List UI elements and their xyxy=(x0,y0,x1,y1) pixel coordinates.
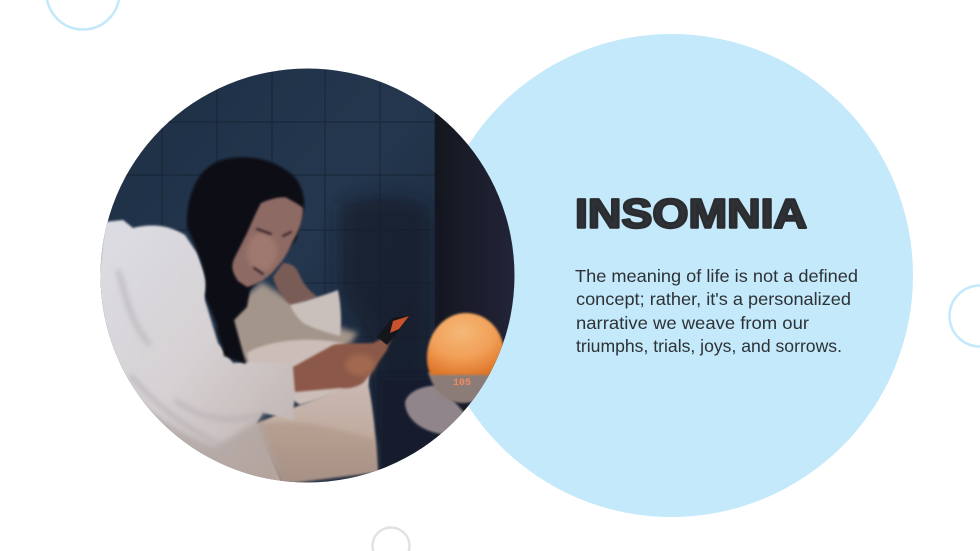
raised sleeve xyxy=(290,290,341,336)
pillow behind arm xyxy=(225,282,358,365)
lower shirt shade xyxy=(146,404,281,480)
shirt and torso xyxy=(90,220,295,490)
lamp clock digits: 105 xyxy=(453,378,471,389)
body text xyxy=(575,266,858,356)
dark wall panel xyxy=(435,112,514,438)
line 2: concept; rather, it's a personalized xyxy=(576,289,851,309)
hand highlight xyxy=(345,354,375,376)
lamp globe xyxy=(427,313,504,375)
hair xyxy=(187,157,304,364)
decorative ring: right edge xyxy=(950,286,980,346)
phone screen glow xyxy=(390,316,409,333)
facial features xyxy=(254,229,291,274)
title: INSOMNIA xyxy=(575,190,807,236)
line 3: narrative we weave from our xyxy=(576,313,809,333)
headboard shadow xyxy=(340,196,432,470)
lower dark area xyxy=(376,376,438,471)
line 4: triumphs, trials, joys, and sorrows. xyxy=(576,336,842,356)
line 1: The meaning of life is not a defined xyxy=(575,266,858,286)
decorative ring: bottom xyxy=(372,528,410,551)
cheek highlight xyxy=(247,233,277,271)
headboard xyxy=(90,60,440,490)
sheet shadow band xyxy=(262,422,377,484)
bedding: sheet xyxy=(255,378,378,484)
phone xyxy=(377,315,410,345)
shirt fold shadows xyxy=(118,270,268,450)
decorative ring: top left xyxy=(46,0,120,30)
raised arm xyxy=(273,263,318,306)
panel: blue circle xyxy=(430,34,913,517)
forearm and hand xyxy=(293,333,393,392)
lamp base xyxy=(428,372,503,403)
photo: woman in bed using phone xyxy=(90,60,520,490)
face xyxy=(232,197,303,287)
bedding: pillow under hand xyxy=(247,340,372,405)
side table xyxy=(404,384,464,436)
